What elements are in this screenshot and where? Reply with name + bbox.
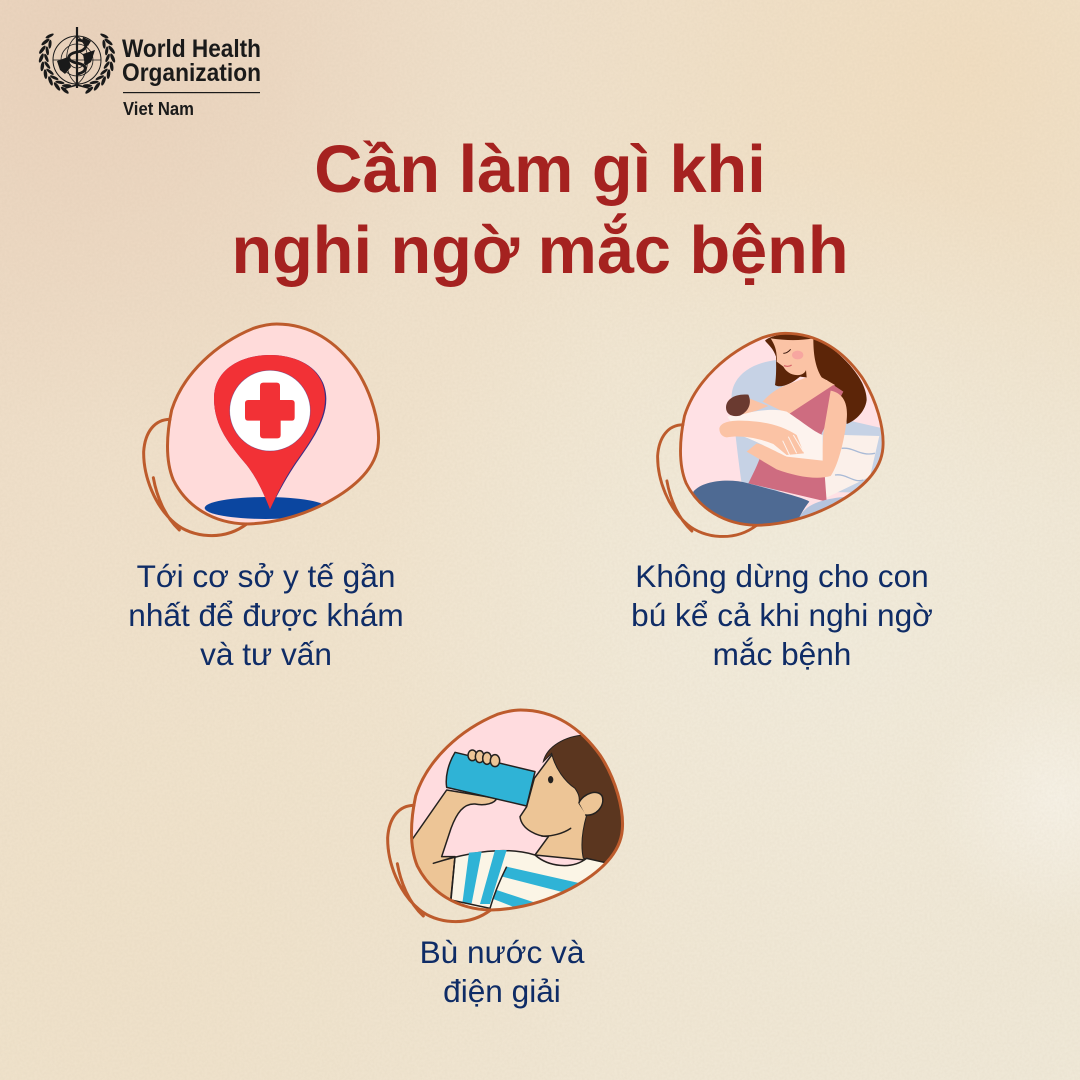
WHO logo xyxy=(38,27,261,119)
logo wordmark: Organization xyxy=(122,59,261,87)
title: Cần làm gì khi xyxy=(314,133,766,207)
text: keep breastfeeding: mắc bệnh xyxy=(713,636,851,672)
icon: map pin in blob xyxy=(144,324,379,536)
icon: WHO emblem xyxy=(38,27,116,95)
panel: rehydrate xyxy=(388,707,632,1009)
text: keep breastfeeding: Không dừng cho con xyxy=(635,558,929,594)
title: nghi ngờ mắc bệnh xyxy=(231,213,849,288)
text: go to clinic: và tư vấn xyxy=(200,636,332,672)
logo wordmark: World Health xyxy=(122,35,261,63)
text: go to clinic: Tới cơ sở y tế gần xyxy=(137,558,395,594)
text: go to clinic: nhất để được khám xyxy=(128,597,404,633)
icon: person drinking in blob xyxy=(388,707,632,922)
panel: keep breastfeeding xyxy=(631,327,933,672)
text: rehydrate: Bù nước và xyxy=(420,934,585,970)
text: rehydrate: điện giải xyxy=(443,973,561,1009)
text: go to clinic xyxy=(128,558,404,672)
panel: go to clinic xyxy=(128,324,404,672)
logo wordmark xyxy=(122,35,261,119)
title xyxy=(231,133,849,288)
text: keep breastfeeding: bú kể cả khi nghi ngờ xyxy=(631,597,933,633)
text: rehydrate xyxy=(420,934,585,1009)
text: keep breastfeeding xyxy=(631,558,933,672)
icon: mother breastfeeding in blob xyxy=(658,327,897,536)
logo wordmark: Viet Nam xyxy=(123,99,194,119)
